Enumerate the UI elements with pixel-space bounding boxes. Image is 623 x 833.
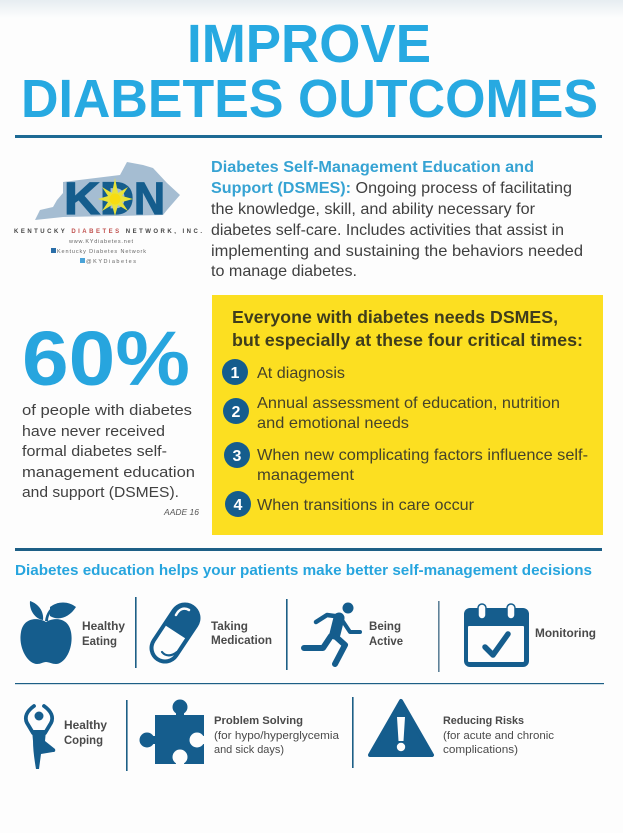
logo letters: K: [64, 173, 101, 224]
icon: apple: [20, 601, 76, 664]
icon: Kentucky map: [35, 162, 180, 220]
item 4: 4: [234, 497, 243, 514]
DSMES definition text: the knowledge, skill, and ability necessary for: [211, 201, 536, 218]
label: Being Active: Active: [369, 636, 403, 648]
panel heading: but especially at these four critical times:: [232, 330, 583, 350]
statistic: 60%: 60%: [22, 316, 190, 402]
title: DIABETES OUTCOMES: [21, 69, 598, 129]
logo letters: D: [100, 173, 134, 224]
label: Reducing Risks: [443, 715, 555, 756]
icon: warning triangle: [370, 701, 432, 755]
label: Taking Medication: Taking: [211, 621, 248, 633]
icon: puzzle piece: [140, 700, 205, 765]
item 4: When transitions in care occur: [257, 497, 475, 514]
statistic description: formal diabetes self-: [22, 443, 167, 460]
citation: AADE 16: [163, 507, 199, 517]
panel heading: Everyone with diabetes needs DSMES,: [232, 307, 558, 327]
title: IMPROVE: [187, 14, 431, 74]
label: Healthy Eating: Eating: [82, 636, 117, 648]
label: Problem Solving: and sick days): [214, 744, 284, 756]
item 2: 2: [232, 404, 241, 421]
web and social links: Kentucky Diabetes Network: [57, 249, 146, 255]
item 3: When new complicating factors influence self-: [257, 447, 588, 464]
item 3: [224, 442, 588, 484]
panel: four critical times: [212, 295, 603, 535]
organization name: KENTUCKY DIABETES NETWORK, INC.: [14, 229, 202, 235]
item 4: [225, 491, 475, 517]
DSMES definition text: [211, 159, 583, 280]
item 3: 3: [233, 448, 242, 465]
DSMES definition text: Diabetes Self-Management Education and: [211, 159, 534, 176]
logo: Kentucky Diabetes Network: [14, 162, 202, 265]
label: Reducing Risks: Reducing Risks: [443, 715, 524, 727]
label: Reducing Risks: complications): [443, 744, 518, 756]
DSMES definition text: diabetes self-care. Includes activities that assist in: [211, 222, 564, 239]
DSMES definition text: implementing and sustaining the behaviors needed: [211, 243, 583, 260]
item 2: [223, 395, 560, 432]
item 2: Annual assessment of education, nutrition: [257, 395, 560, 412]
label: Monitoring: Monitoring: [535, 628, 596, 640]
label: Reducing Risks: (for acute and chronic: [443, 730, 555, 742]
web and social links: @KYDiabetes: [86, 259, 136, 265]
label: Problem Solving: (for hypo/hyperglycemia: [214, 730, 340, 742]
label: Healthy Coping: [64, 720, 108, 747]
item 1: At diagnosis: [257, 365, 345, 382]
icon: sun: [98, 178, 133, 216]
label: Healthy Eating: [82, 621, 126, 648]
web and social links: www.KYdiabetes.net: [68, 239, 133, 245]
title: [21, 14, 598, 129]
icon: capsule: [154, 609, 189, 660]
label: Problem Solving: Problem Solving: [214, 715, 303, 727]
label: Being Active: Being: [369, 621, 401, 633]
label: Problem Solving: [214, 715, 340, 756]
icon: calendar with check: [464, 604, 529, 667]
statistic description: have never received: [22, 423, 165, 440]
item 1: 1: [231, 365, 240, 382]
DSMES definition text: to manage diabetes.: [211, 263, 357, 280]
statistic description: [22, 402, 195, 501]
label: Healthy Coping: Healthy: [64, 720, 108, 732]
panel heading: [232, 307, 583, 350]
icon: runner: [304, 602, 360, 664]
section heading: Diabetes education helps your patients make better self-management decisions: [15, 562, 592, 579]
logo letters: N: [134, 173, 165, 224]
label: Healthy Coping: Coping: [64, 735, 103, 747]
icon: yoga figure: [26, 706, 55, 769]
label: Being Active: [369, 621, 403, 648]
item 3: management: [257, 467, 355, 484]
item 2: and emotional needs: [257, 415, 409, 432]
label: Taking Medication: Medication: [211, 635, 272, 647]
statistic description: and support (DSMES).: [22, 484, 179, 501]
item 1: [222, 359, 345, 385]
web and social links: [51, 239, 146, 265]
statistic description: of people with diabetes: [22, 402, 192, 419]
DSMES definition text: Support (DSMES): Ongoing process of facilitating: [211, 180, 572, 197]
label: Taking Medication: [211, 621, 272, 647]
logo letters: [64, 173, 165, 224]
label: Healthy Eating: Healthy: [82, 621, 126, 633]
statistic description: management education: [22, 464, 195, 481]
